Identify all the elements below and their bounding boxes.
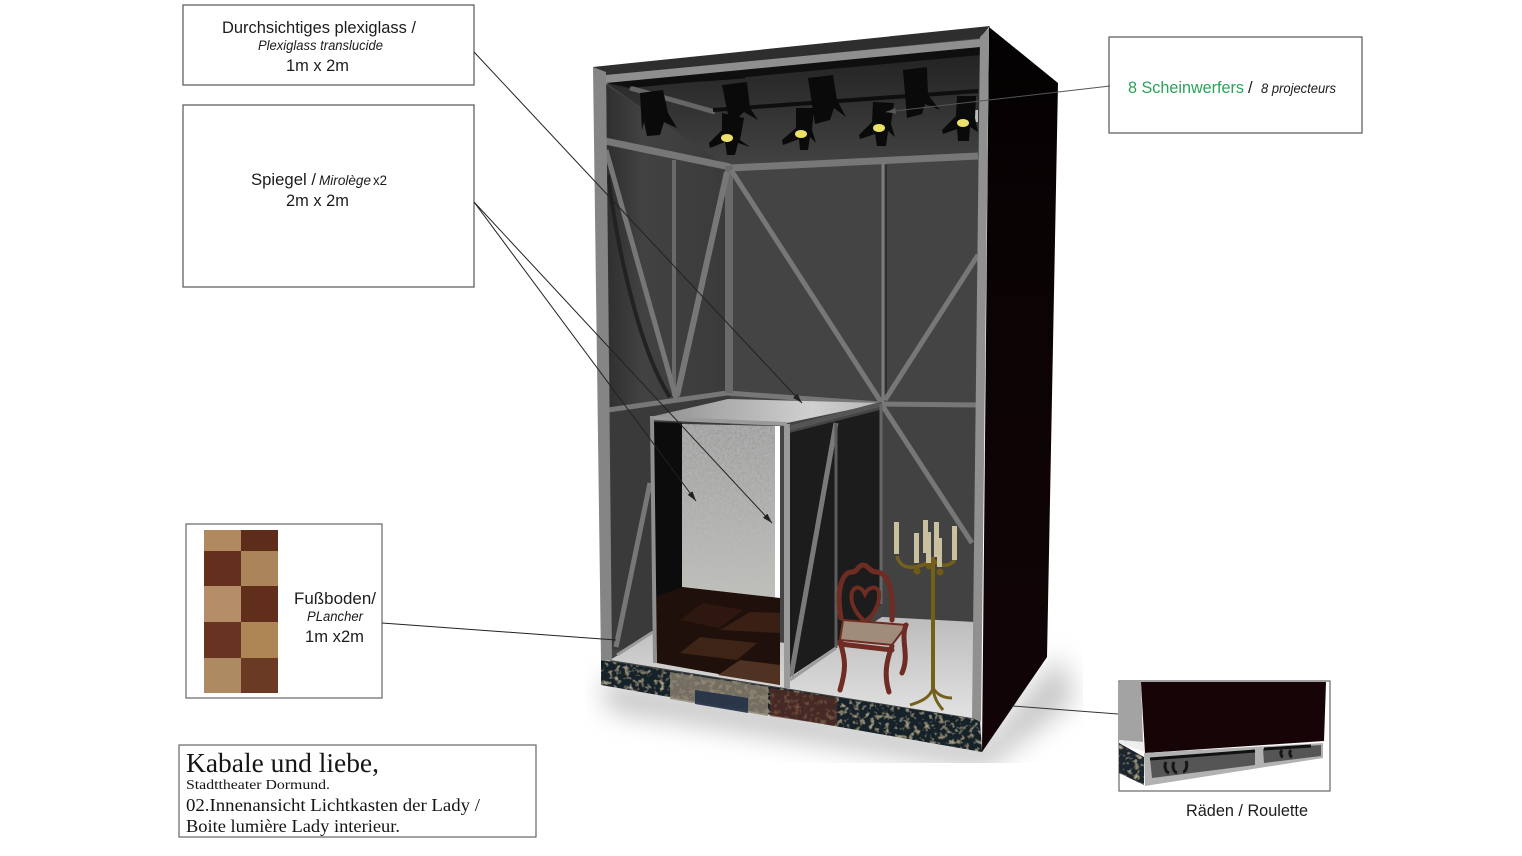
panel: mirror label: Mirolège xyxy=(319,173,371,188)
detail: wheel frame xyxy=(1144,743,1323,786)
panel: floor label with swatch xyxy=(186,524,382,698)
inner plexiglass box xyxy=(617,399,882,688)
panel: spotlights label: 8 projecteurs xyxy=(1261,81,1336,96)
panel: plexiglass label: 1m x 2m xyxy=(286,57,349,75)
caption: wheels: Räden / Roulette xyxy=(1186,802,1308,820)
dark checker floor xyxy=(655,587,780,685)
leader: wheels xyxy=(1012,706,1118,714)
panel: spotlights label xyxy=(1109,37,1362,133)
panel: title block xyxy=(179,745,536,837)
soft floor shadow xyxy=(600,655,1075,770)
panel: plexiglass label xyxy=(183,5,474,85)
icon: lit spotlight 3 xyxy=(859,102,895,146)
panel: floor label with swatch: Fußboden/ xyxy=(294,590,376,608)
panel: floor label with swatch: PLancher xyxy=(307,609,363,624)
detail: wheels xyxy=(1165,750,1292,773)
interior back and left walls xyxy=(606,36,985,722)
white slit xyxy=(775,426,780,598)
icon: lit spotlight 2 xyxy=(782,108,816,150)
leader: floor xyxy=(382,623,616,640)
panel: plexiglass label: Durchsichtiges plexiglass / xyxy=(222,19,416,37)
cabinet right outer side xyxy=(982,27,1058,752)
candelabra xyxy=(894,520,957,710)
detail: wheel slots xyxy=(1150,745,1321,778)
panel: wheels detail xyxy=(1119,681,1330,791)
black inner panel xyxy=(654,422,682,612)
arrow: mirror one xyxy=(474,202,696,501)
wall frame beams and diagonals xyxy=(605,88,978,647)
panel: mirror label: 2m x 2m xyxy=(286,192,349,210)
mirror with concrete reflection xyxy=(682,424,775,598)
detail: side wall xyxy=(1119,682,1143,742)
panel: floor label with swatch: 1m x2m xyxy=(305,628,364,646)
chair xyxy=(839,565,907,692)
panel: spotlights label: 8 Scheinwerfers xyxy=(1128,79,1244,97)
detail: dark side panel xyxy=(1141,682,1326,753)
illustration: light box cabinet xyxy=(593,26,1058,752)
panel: title block: Boite lumière Lady interieur. xyxy=(186,816,400,836)
arrow: spotlights xyxy=(886,86,1110,112)
roof and valance xyxy=(593,26,990,88)
tapestry plinth xyxy=(601,660,982,752)
box frame xyxy=(617,404,882,688)
front posts xyxy=(593,28,989,722)
panel: mirror label: Spiegel / xyxy=(251,171,316,189)
panel: spotlights label: / xyxy=(1248,79,1253,97)
plexiglass top xyxy=(650,399,882,423)
arrow: plexiglass xyxy=(474,52,802,403)
panel: title block: Kabale und liebe, xyxy=(186,748,379,778)
icon: lit spotlight 4 xyxy=(942,96,978,141)
panel: mirror label: x2 xyxy=(373,173,387,188)
stage floor xyxy=(610,617,978,719)
floor checker swatch xyxy=(204,530,278,693)
panel: mirror label xyxy=(183,105,474,287)
panel: plexiglass label: Plexiglass translucide xyxy=(258,38,383,53)
arrow: mirror two xyxy=(474,202,772,523)
detail: floor edge xyxy=(1119,740,1145,752)
detail: tapestry corner xyxy=(1119,743,1144,785)
icon: unlit hanging spotlights xyxy=(640,67,940,136)
right side panel xyxy=(789,410,882,677)
icon: lit spotlight 1 xyxy=(709,113,750,155)
panel: title block: Stadttheater Dormund. xyxy=(186,778,330,793)
spotlight rails xyxy=(630,77,978,122)
panel: title block: 02.Innenansicht Lichtkasten der Lady / xyxy=(186,795,480,815)
